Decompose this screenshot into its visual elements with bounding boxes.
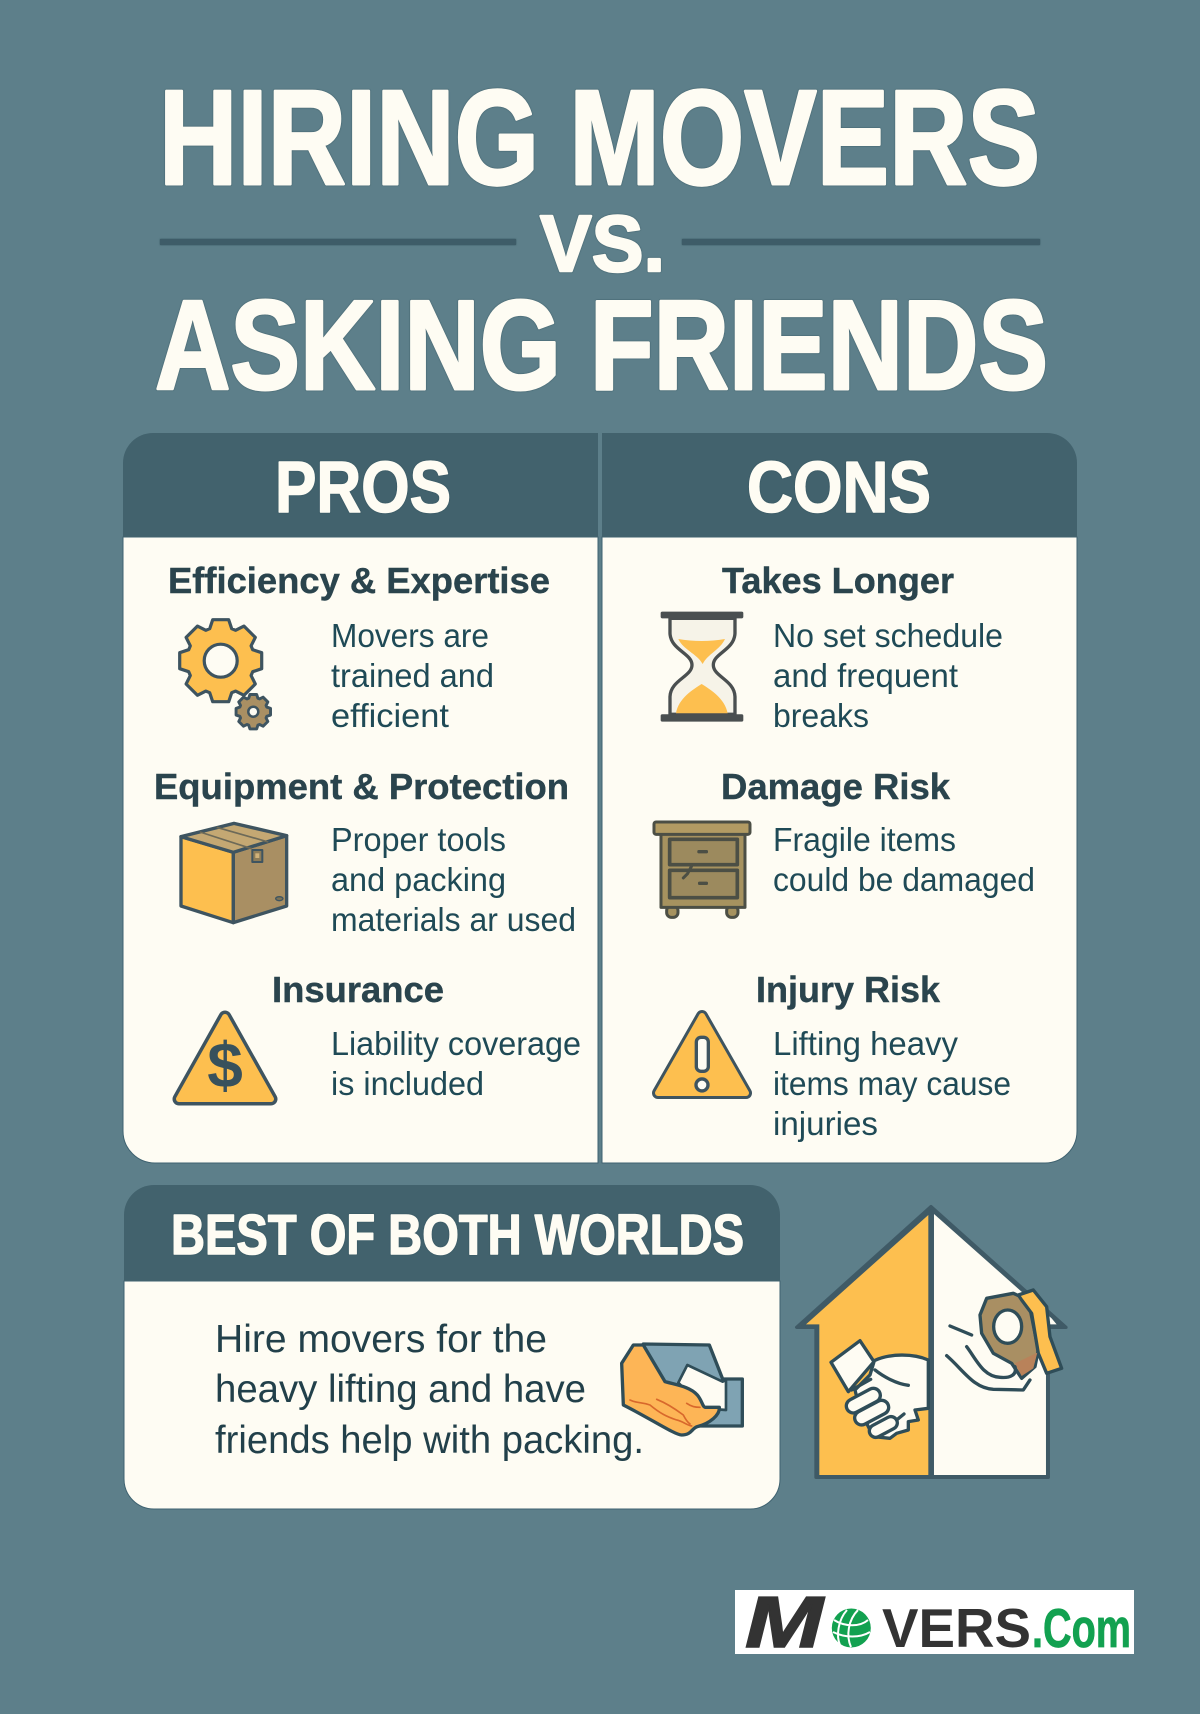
pros item: efficiency and expertise: trained and [331, 657, 494, 694]
pros item: equipment and protection: Equipment & Protection [154, 766, 569, 807]
pros item: efficiency and expertise: efficient [331, 697, 449, 734]
logo: Movers.com: .Com [1032, 1597, 1131, 1659]
pros item: efficiency and expertise: Movers are [331, 617, 489, 654]
icon: dollar warning triangle: $ [207, 1029, 243, 1101]
panel: pros: PROS [275, 448, 451, 528]
icon: hourglass [661, 612, 743, 722]
title [155, 62, 1048, 416]
cons item: injury risk: Lifting heavy [773, 1025, 958, 1062]
cons item: takes longer: Takes Longer [722, 560, 954, 601]
sub-icon: hand with tape roll [947, 1290, 1062, 1390]
cons item: takes longer [661, 560, 1003, 734]
cons item: damage risk: could be damaged [773, 861, 1035, 898]
panel: best of both worlds: BEST OF BOTH WORLDS [171, 1203, 744, 1267]
icon: house with handshake and packing tape [797, 1207, 1066, 1477]
title: VS. [540, 199, 665, 288]
sub-icon: hand with card [831, 1341, 928, 1440]
pros item: insurance: Liability coverage [331, 1025, 581, 1062]
cons item: injury risk: injuries [773, 1105, 878, 1142]
logo: Movers.com [735, 1583, 1134, 1663]
pros item: insurance: Insurance [272, 969, 444, 1010]
cons item: damage risk [654, 766, 1035, 917]
icon: cardboard box [181, 823, 287, 923]
pros item: equipment and protection: and packing [331, 861, 506, 898]
cons item: takes longer: No set schedule [773, 617, 1003, 654]
icon: warning triangle [658, 1016, 746, 1093]
panel: cons: CONS [747, 448, 931, 528]
panel: cons [602, 433, 1077, 1163]
logo: Movers.com: M [745, 1583, 826, 1663]
body text [215, 1318, 644, 1462]
cons item: injury risk: Injury Risk [756, 969, 941, 1010]
logo: Movers.com: VERS [882, 1597, 1031, 1659]
body text: heavy lifting and have [215, 1368, 586, 1411]
pros item: efficiency and expertise [168, 560, 550, 734]
icon: damaged nightstand [654, 822, 750, 917]
cons item: injury risk: items may cause [773, 1065, 1011, 1102]
pros item: equipment and protection: materials ar used [331, 901, 576, 938]
panel: best of both worlds [124, 1185, 780, 1509]
pros item: insurance: is included [331, 1065, 484, 1102]
pros item: insurance [179, 969, 581, 1102]
icon: green globe [832, 1608, 871, 1648]
icon: gears [180, 620, 271, 729]
pros item: equipment and protection: Proper tools [331, 821, 506, 858]
icon: hand holding box [622, 1344, 742, 1435]
pros item: efficiency and expertise: Efficiency & Expertise [168, 560, 550, 601]
body text: friends help with packing. [215, 1419, 644, 1462]
icon: dollar warning triangle [179, 1017, 271, 1101]
cons item: damage risk: Damage Risk [721, 766, 951, 807]
panel: pros [123, 433, 598, 1163]
cons item: injury risk [658, 969, 1011, 1142]
pros item: equipment and protection [154, 766, 576, 938]
cons item: takes longer: breaks [773, 697, 869, 734]
cons item: takes longer: and frequent [773, 657, 958, 694]
body text: Hire movers for the [215, 1318, 547, 1361]
cons item: damage risk: Fragile items [773, 821, 956, 858]
